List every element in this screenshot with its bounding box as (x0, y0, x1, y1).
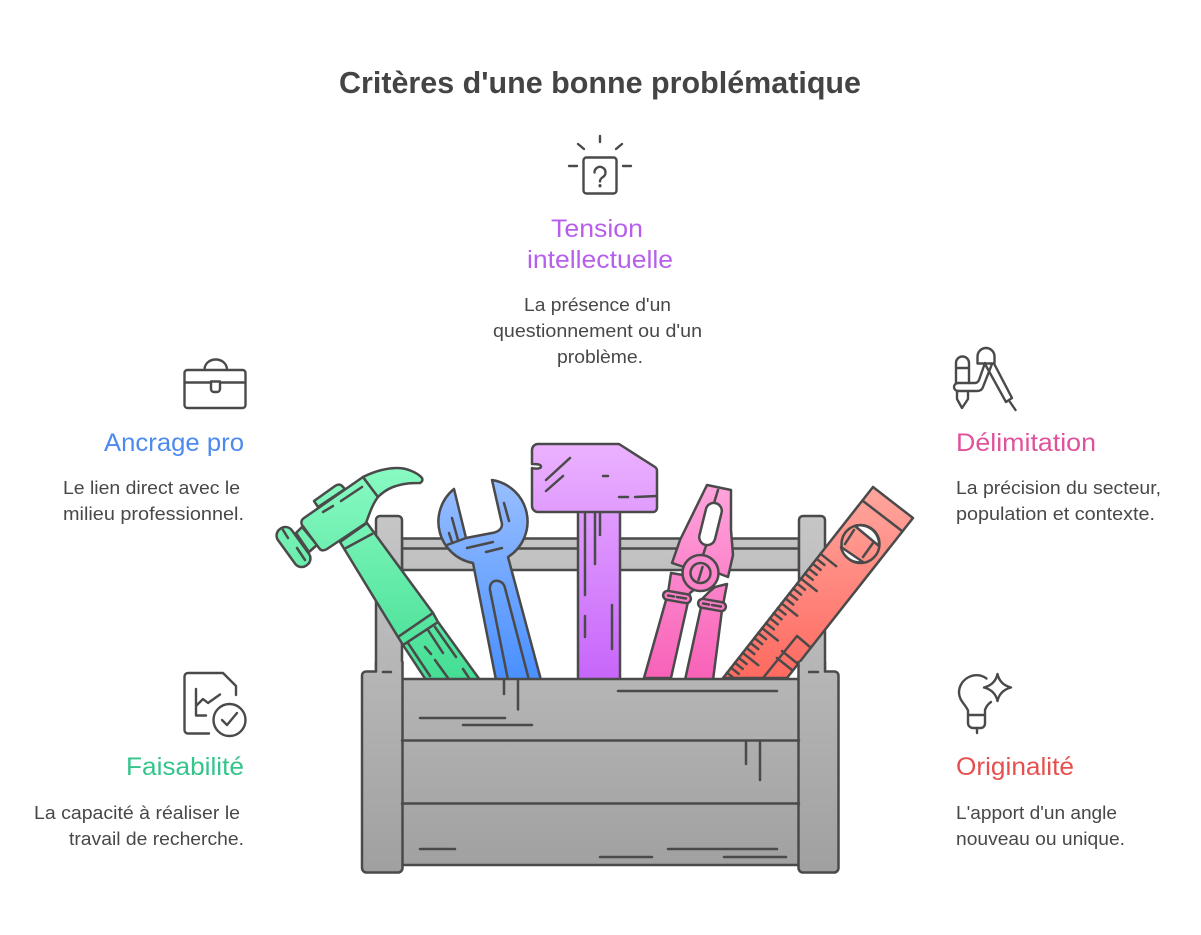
text block: Tension intellectuelle description: problème. (557, 347, 643, 367)
text block: Originalité description: nouveau ou unique. (956, 829, 1125, 849)
text block: Ancrage pro description: milieu professionnel. (63, 504, 244, 524)
toolbox front (362, 662, 838, 872)
text block: Délimitation description: La précision du secteur, (956, 478, 1161, 498)
heading: Ancrage pro: Ancrage pro (104, 429, 244, 457)
tool: red spirit level (723, 487, 913, 679)
panel: Originalité (956, 674, 1125, 849)
title: Critères d'une bonne problématique (339, 65, 861, 100)
icon: document with chart and check (184, 673, 246, 736)
icon: light bulb with sparkle (959, 674, 1011, 733)
tool: green hammer (273, 468, 480, 680)
toolbox back frame (376, 516, 825, 680)
panel: Délimitation (954, 348, 1161, 524)
heading: Tension intellectuelle: intellectuelle (527, 246, 673, 274)
text block: Tension intellectuelle description: questionnement ou d'un (493, 321, 702, 341)
heading: Délimitation: Délimitation (956, 429, 1096, 457)
text block: Originalité description: L'apport d'un angle (956, 803, 1117, 823)
text block: Ancrage pro description: Le lien direct avec le (63, 478, 240, 498)
heading: Faisabilité: Faisabilité (126, 753, 244, 781)
heading: Originalité: Originalité (956, 753, 1074, 781)
tool: blue wrench (438, 480, 541, 680)
text block: Tension intellectuelle description: La présence d'un (524, 295, 671, 315)
text block: Faisabilité description: La capacité à réaliser le (34, 803, 240, 823)
panel: Tension intellectuelle (493, 136, 702, 367)
icon: compass and pencil (954, 348, 1016, 410)
text block: Délimitation description: population et contexte. (956, 504, 1155, 524)
icon: question mark card with rays (569, 136, 631, 194)
panel: Ancrage pro (63, 360, 246, 524)
tool: pink pliers (644, 485, 733, 680)
text block: Faisabilité description: travail de recherche. (69, 829, 244, 849)
heading: Tension intellectuelle: Tension (551, 215, 643, 243)
tool: purple mallet (532, 444, 657, 680)
panel: Faisabilité (34, 673, 246, 849)
icon: briefcase (184, 360, 246, 408)
